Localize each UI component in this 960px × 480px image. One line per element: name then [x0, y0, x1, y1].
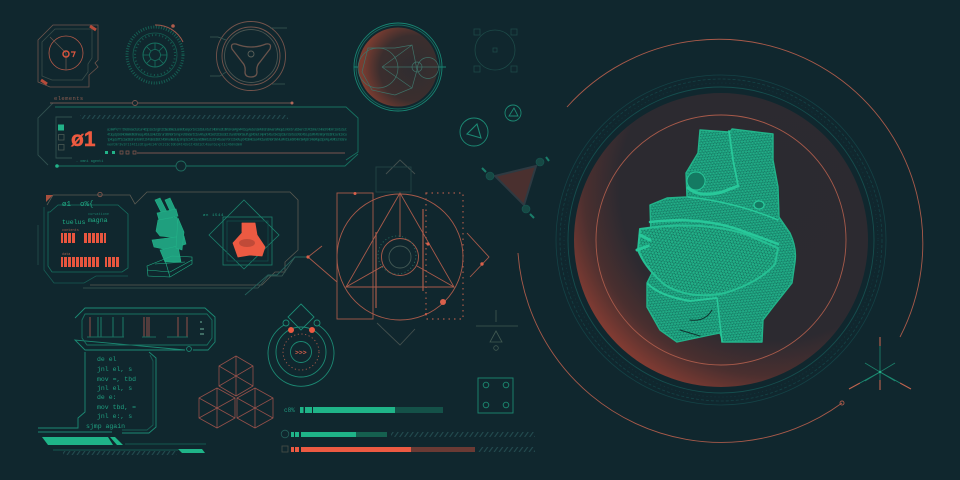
card labels: contents: [62, 229, 79, 233]
inner lines: [346, 193, 454, 287]
icon: target badge: [38, 25, 98, 87]
bar three: [282, 446, 535, 452]
card labels: [62, 201, 109, 257]
panel: specimen card: [38, 192, 308, 288]
panel: progress bars: [281, 407, 535, 452]
data text block: vent0r3v3r1t4t1s3tqu4s14rch1t3ct0b34t43v1t43d1ct4suntexpl1c4b0n3m0: [107, 142, 242, 148]
illustration: wireframe heart: [637, 129, 795, 342]
panel: waveform console: [38, 308, 215, 455]
main circle: [337, 194, 463, 320]
icon: target with diamond: [268, 304, 334, 386]
icon: triad ring: [210, 22, 287, 90]
data text block: 4l1qu1p3x34c0mm0d0c0nsequ4tdu1s4ut31rur3d0l0r1nrepreh3nder1t1nv0lupt4t3v3l1t3ss3c1llumd0l0r3eufug14tnull4p4r14tur3xc3pt3urs1ntocc43c4tcup1d4t4tn0npr01d3ntsuntincu: [107, 132, 347, 138]
icon: dim reticle: [474, 29, 517, 72]
card frames: [38, 192, 308, 288]
panel frame: [38, 100, 358, 171]
bar one: c8%: [284, 407, 295, 414]
icon: star mark: [849, 337, 911, 390]
chart: outer arcs: [518, 39, 923, 442]
card labels: o%{: [80, 201, 94, 209]
text: label: øn 1544: [203, 214, 224, 218]
status row: [105, 151, 345, 154]
code lines: jnl el, s: [97, 366, 132, 373]
hatch: [63, 451, 177, 455]
main lobe mesh: [638, 225, 778, 295]
connector: [308, 246, 337, 282]
dim chevrons: [376, 160, 415, 345]
green bars: [42, 437, 205, 453]
icon: disc with lens diagram: [354, 23, 446, 111]
target frame with organ: [209, 200, 279, 269]
data text block: lp4quiofficiad3s3runtm0ll1t4n1m1d3stl4b0rum$edutp3rsp1c14t1sund30mn1s1st3n4tuserr0rs1tv0lupt4t3m4ccus4nt1umd0l0r3ml4ud4nt1umt0t4mr3m4p3r14m34qu31ps4qu434bill0inv: [107, 138, 348, 142]
triangle: [346, 193, 454, 287]
bar two: [281, 430, 535, 438]
card labels: magna: [88, 217, 108, 224]
barcodes: [61, 233, 120, 267]
icon: isometric cubes: [199, 356, 273, 428]
code lines: [86, 356, 136, 430]
icon: microscope: [147, 198, 192, 277]
panel: elements text panel: [38, 95, 358, 171]
code lines: mov =, tbd: [97, 376, 136, 383]
card labels: ø1: [62, 201, 72, 209]
card labels: tuelus: [62, 219, 86, 226]
heading: elements: elements: [54, 95, 84, 102]
code lines: de el: [97, 356, 117, 363]
bar one: [284, 407, 443, 414]
icon: cross and triangle: [476, 310, 518, 350]
icon: filled triangle with nodes: [482, 157, 549, 218]
icon: dice square: [478, 378, 513, 413]
data text block: [107, 128, 348, 148]
code lines: de e:: [97, 394, 117, 401]
checkboxes: [58, 124, 64, 150]
code lines: sjmp again: [86, 423, 125, 430]
code lines: jnl e:, s: [97, 413, 132, 420]
big code: ø1: [71, 128, 96, 151]
card labels: curvatione: [88, 212, 109, 217]
chevrons text: >>>: [295, 350, 307, 356]
panel: geometric diagram: [245, 160, 489, 345]
card labels: data: [62, 252, 70, 257]
heart ridges: [637, 131, 778, 342]
code lines: mov tbd, =: [97, 404, 136, 411]
data text block: a;m%#^e*r!t%c0nsectetur4d1p1sc1ng3l1t$edd0e1usm0dtempor1nc1d1duntutl4b0re3td0l0rem4gn44l1qu4utenim4dm1n1mven14mqu1sn0strud3xerc1t4t10null4mc0l4b0r1sn1s1ut: [107, 128, 347, 132]
dotted rectangle: [426, 193, 463, 319]
nodes: [306, 192, 484, 315]
caption: - omni agenti: [76, 159, 103, 164]
heart circle: disc and rings: [556, 75, 886, 405]
code lines: jnl el, s: [97, 385, 132, 392]
console frame: [38, 308, 215, 450]
waveform: [87, 317, 204, 337]
heart vessels and back: [647, 129, 795, 342]
hatch strip: [80, 115, 288, 119]
frame rectangle: [337, 193, 373, 319]
right chevron: [467, 233, 489, 277]
icon: small triangle circles: [460, 105, 521, 146]
icon: green dial: [127, 24, 183, 83]
